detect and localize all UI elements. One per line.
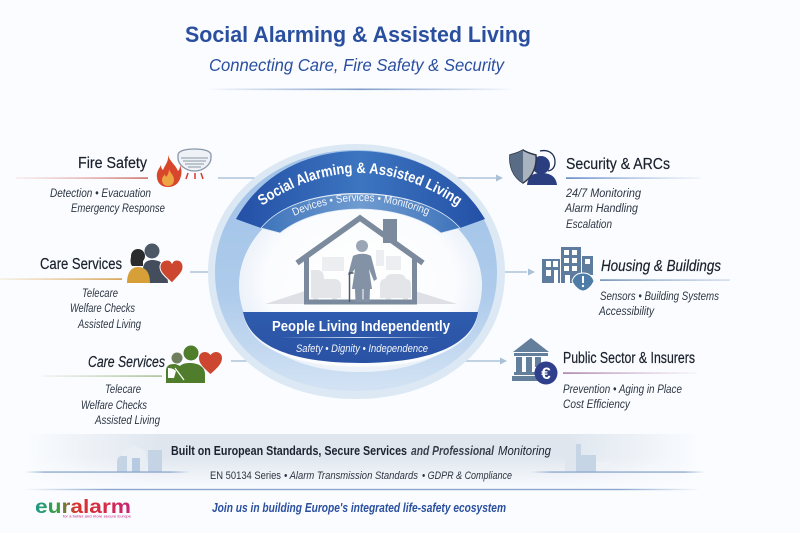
call to action: Join us in building Europe's integrated life-safety ecosystem — [212, 501, 506, 515]
subtitle: Connecting Care, Fire Safety & Security — [209, 55, 505, 75]
text: public sector details: Prevention • Aging in Place — [563, 384, 682, 396]
heading: housing: Housing & Buildings — [601, 258, 721, 275]
icon: shield — [510, 150, 536, 183]
text: security details — [564, 188, 642, 231]
skyline left — [117, 445, 162, 472]
panel: care services 2 — [42, 346, 222, 427]
panel: care services — [0, 244, 183, 331]
logo: euralarm: euralarm — [35, 497, 131, 518]
text: care services details — [70, 288, 141, 331]
connector: public sector arrow — [447, 358, 507, 364]
text: housing details: Accessibility — [598, 306, 655, 318]
text: fire safety details: Emergency Response — [71, 203, 165, 215]
top arc banner: Devices • Services • Monitoring — [292, 194, 430, 216]
heading: standards: Built on European Standards, Secure Services — [171, 443, 407, 458]
top arc banner — [236, 151, 485, 234]
text: care services details: Welfare Checks — [70, 303, 135, 315]
panel: fire safety — [16, 149, 211, 215]
text: care services second details: Assisted Living — [94, 415, 160, 427]
text: housing details — [598, 291, 719, 318]
connector: care services 2 arrow — [231, 358, 278, 364]
panel: housing and buildings — [542, 247, 730, 318]
icon: bank — [512, 338, 549, 381]
icon: heart — [160, 260, 183, 283]
text: standards list: • Alarm Transmission Standards — [284, 470, 418, 482]
logo: euralarm: for a better and more secure Europe — [63, 514, 131, 518]
bottom banner: People Living Independently — [272, 319, 451, 335]
connector: security arrow — [457, 174, 503, 182]
icon: euro coin — [534, 362, 558, 384]
title: Social Alarming & Assisted Living — [185, 22, 531, 47]
text: security details: Escalation — [566, 219, 612, 231]
text: fire safety details: Detection • Evacuation — [50, 188, 151, 200]
text: security details: Alarm Handling — [564, 203, 639, 215]
icon: couple — [127, 244, 168, 283]
text: care services details: Assisted Living — [77, 319, 141, 331]
house illustration — [265, 218, 457, 304]
panel: standards band — [25, 434, 705, 490]
icon: heart green group — [199, 352, 222, 374]
hub outer ring — [208, 144, 505, 399]
panel: security and ARCs — [510, 150, 700, 231]
icon: smoke detector — [178, 149, 211, 179]
text: standards list: • GDPR & Compliance — [422, 470, 512, 482]
heading: fire safety: Fire Safety — [78, 155, 147, 172]
heading: care services: Care Services — [40, 256, 122, 273]
text: housing details: Sensors • Building Systems — [600, 291, 719, 303]
skyline right — [565, 438, 610, 472]
heading: care services second: Care Services — [88, 354, 165, 371]
text: public sector details — [563, 384, 682, 411]
panel: public sector and insurers — [512, 338, 697, 411]
text: security details: 24/7 Monitoring — [565, 188, 642, 200]
connector: housing arrow — [467, 268, 535, 276]
connector: care services to hub — [190, 271, 254, 273]
text: care services second details: Welfare Checks — [81, 400, 147, 412]
text: care services details: Telecare — [82, 288, 118, 300]
text: standards list — [210, 470, 512, 482]
central hub — [208, 144, 505, 399]
hub blue ring — [215, 150, 497, 391]
icon: buildings — [542, 247, 594, 291]
hub white centre — [239, 190, 482, 372]
icon: euro coin: € — [541, 364, 551, 383]
text: care services second details: Telecare — [105, 384, 141, 396]
icon: carer and person — [166, 346, 205, 383]
top arc banner: Social Alarming & Assisted Living — [258, 162, 462, 208]
connector: fire safety to hub — [218, 177, 264, 179]
text: standards list: EN 50134 Series — [210, 470, 281, 482]
text: public sector details: Cost Efficiency — [563, 399, 631, 411]
heading: security: Security & ARCs — [566, 156, 670, 173]
heading: standards: and Professional — [411, 443, 494, 458]
icon: flame — [157, 155, 182, 187]
text: fire safety details — [50, 188, 165, 215]
heading: public sector: Public Sector & Insurers — [563, 350, 695, 367]
icon: headset operator — [527, 151, 557, 185]
text: care services second details — [81, 384, 160, 427]
bottom banner: Safety • Dignity • Independence — [296, 343, 428, 355]
heading: standards: Monitoring — [498, 443, 552, 458]
bottom banner — [243, 312, 478, 366]
